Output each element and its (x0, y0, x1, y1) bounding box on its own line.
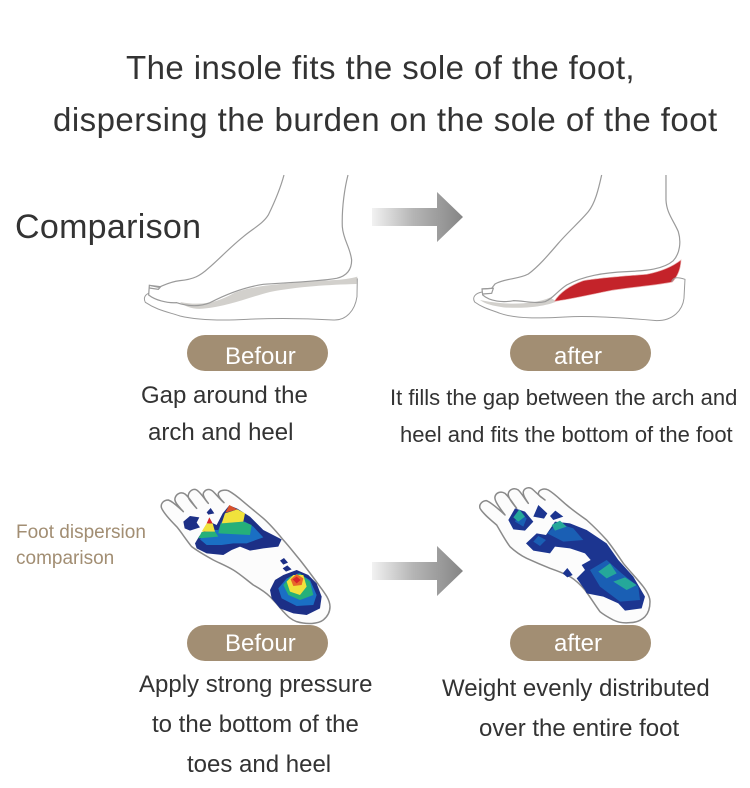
title: dispersing the burden on the sole of the foot (53, 101, 718, 138)
pill: after top (510, 335, 651, 371)
heading: foot dispersion comparison: Foot dispersion (16, 522, 146, 543)
title: The insole fits the sole of the foot, (126, 49, 635, 86)
text: strong pressure description: toes and heel (187, 751, 331, 778)
illustration: pressure map before (161, 489, 330, 624)
text: gap description: Gap around the (141, 382, 308, 409)
heading: foot dispersion comparison: comparison (16, 548, 114, 569)
pill: befour bottom: Befour (225, 630, 296, 657)
pill: befour top: Befour (225, 343, 296, 370)
text: even distribution description: over the entire foot (479, 715, 679, 742)
text: fills description: It fills the gap between the arch and (390, 385, 737, 410)
pill: befour top (187, 335, 328, 371)
text: strong pressure description (139, 671, 372, 778)
text: fills description: heel and fits the bottom of the foot (400, 422, 733, 447)
text: strong pressure description: to the bottom of the (152, 711, 359, 738)
heading: comparison: Comparison (15, 208, 201, 246)
text: gap description (141, 382, 308, 446)
illustration: foot after (474, 175, 685, 321)
illustration: foot before (144, 175, 357, 320)
pill: after bottom: after (554, 630, 602, 657)
text: gap description: arch and heel (148, 419, 293, 446)
title (53, 49, 718, 138)
pill: befour bottom (187, 625, 328, 661)
text: fills description (390, 385, 737, 447)
foot outline (480, 488, 650, 623)
text: strong pressure description: Apply strong pressure (139, 671, 372, 698)
arrow: top (372, 192, 463, 242)
foot outline (161, 489, 330, 624)
pill: after top: after (554, 343, 602, 370)
illustration: pressure map after (480, 488, 650, 623)
text: even distribution description (442, 675, 710, 742)
pressure zones (183, 505, 322, 615)
text: even distribution description: Weight evenly distributed (442, 675, 710, 702)
pressure zones (508, 505, 645, 611)
pill: after bottom (510, 625, 651, 661)
heading: foot dispersion comparison (16, 522, 146, 569)
